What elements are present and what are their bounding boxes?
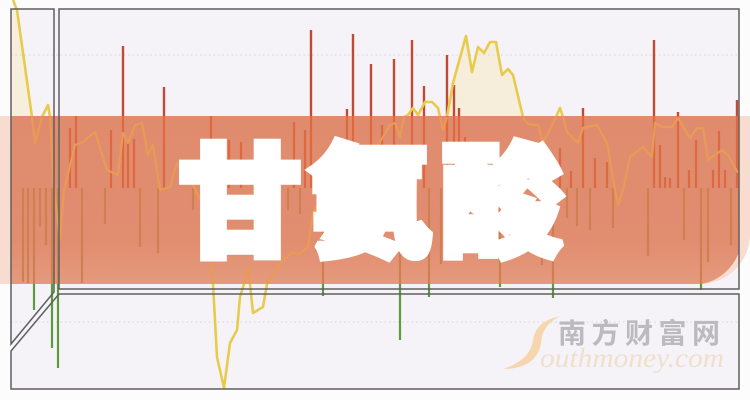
frame: narrow left window — [11, 9, 54, 344]
watermark logo swoosh — [503, 316, 561, 369]
price line seen through the band — [32, 117, 738, 284]
red rising bars — [123, 30, 737, 117]
falling bars seen through the band — [23, 188, 731, 284]
watermark domain: outhmoney.com — [540, 343, 724, 373]
rising bars seen through the band — [70, 116, 737, 188]
title band — [0, 116, 750, 284]
yellow price line above and below band — [13, 0, 563, 388]
watermark Chinese name: 南方财富网 — [558, 317, 720, 349]
frame: lower window — [11, 294, 739, 389]
title text: 甘氨酸 — [179, 136, 563, 272]
frame: main upper window — [59, 9, 739, 289]
green falling bars — [34, 284, 701, 368]
